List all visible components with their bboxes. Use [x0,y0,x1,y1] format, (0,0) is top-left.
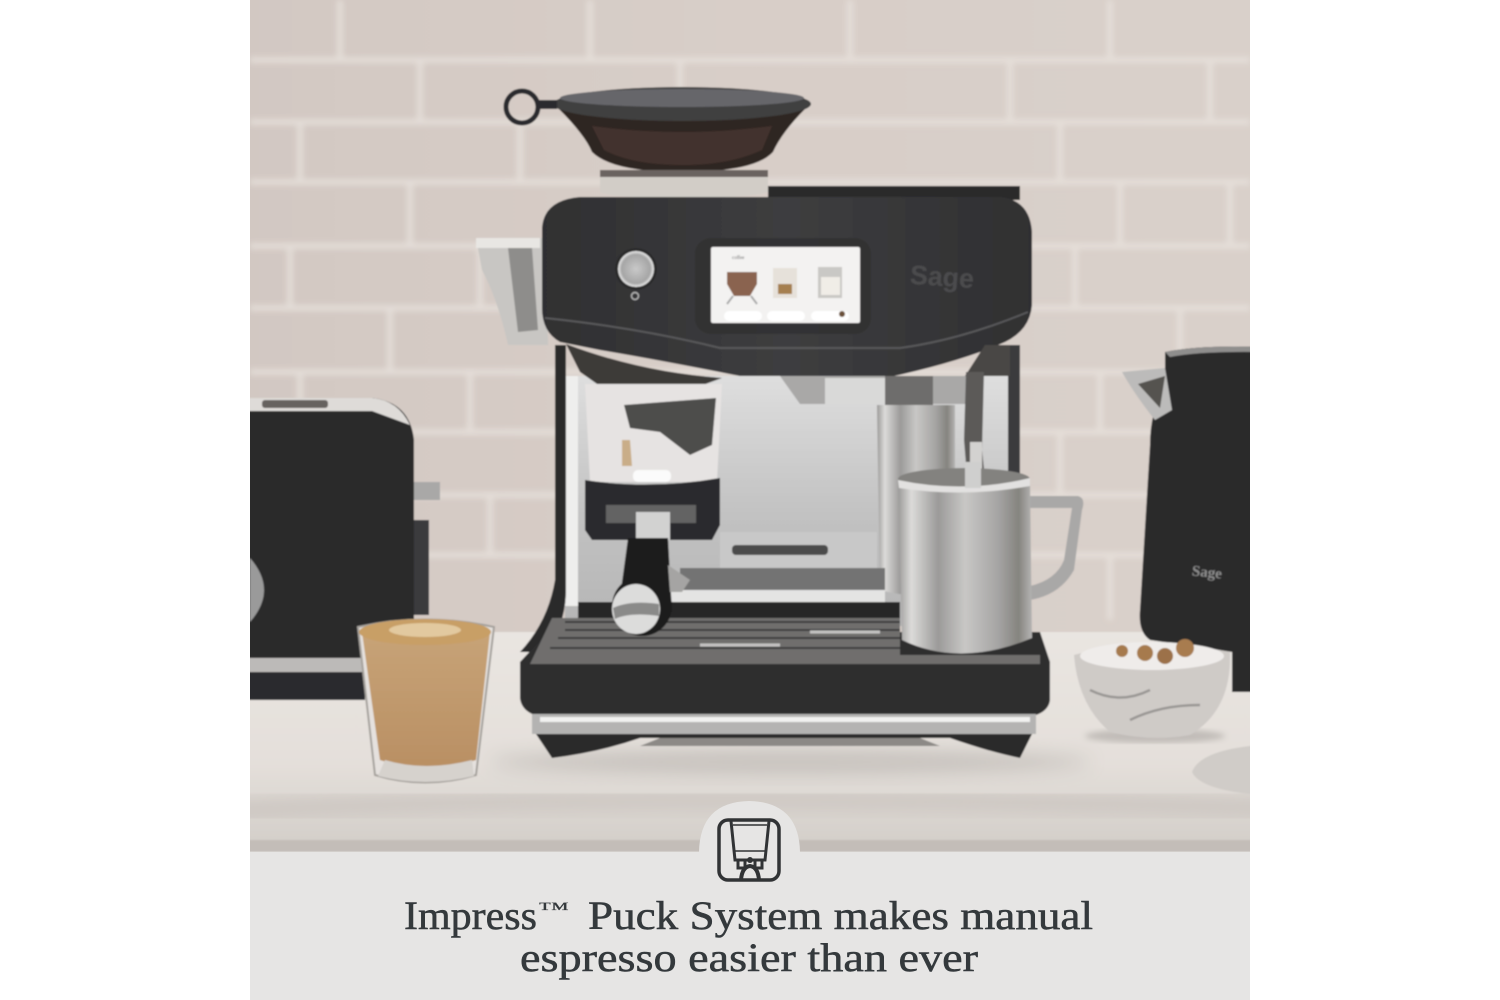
nut bowl [1074,639,1230,743]
steam wand [963,372,985,470]
icon: puck system [719,820,779,880]
right column [1007,344,1021,474]
reflective tray inside [578,532,900,622]
glass of coffee [358,619,494,782]
caption heading: Puck System makes manual [588,893,1093,938]
brick wall [240,0,1260,640]
grinder hopper [506,87,811,198]
photo panel [200,0,1300,852]
kettle [1122,347,1260,692]
caption heading: Impress [404,893,537,938]
toaster [240,398,440,700]
group head band [780,376,980,404]
chrome interior [565,376,1020,626]
marble coaster [1192,746,1250,794]
milk jug front [898,462,1083,654]
head lower lip highlight [545,312,1028,348]
machine head [542,197,1032,378]
portafilter [612,538,690,636]
milk jug behind [877,405,955,595]
bottom caption band [250,801,1250,1000]
control knob [615,248,657,300]
side column left [520,345,566,652]
caption heading: espresso easier than ever [520,935,978,980]
fabric under head [566,344,722,386]
kettle: Sage [1191,563,1223,583]
touch screen [695,238,871,334]
chrome side lever [476,238,548,345]
icon badge [699,801,800,852]
drip tray base [520,618,1050,758]
top tray [768,186,1020,200]
caption heading: ™ [538,899,569,920]
coffee machine [476,87,1083,758]
grinder chrome reflective body [585,384,722,540]
marble counter [240,632,1260,852]
brand logo: Sage [909,260,975,294]
caption heading [404,893,1093,980]
touch screen: coffee [732,256,745,261]
hopper ring handle [506,91,538,123]
